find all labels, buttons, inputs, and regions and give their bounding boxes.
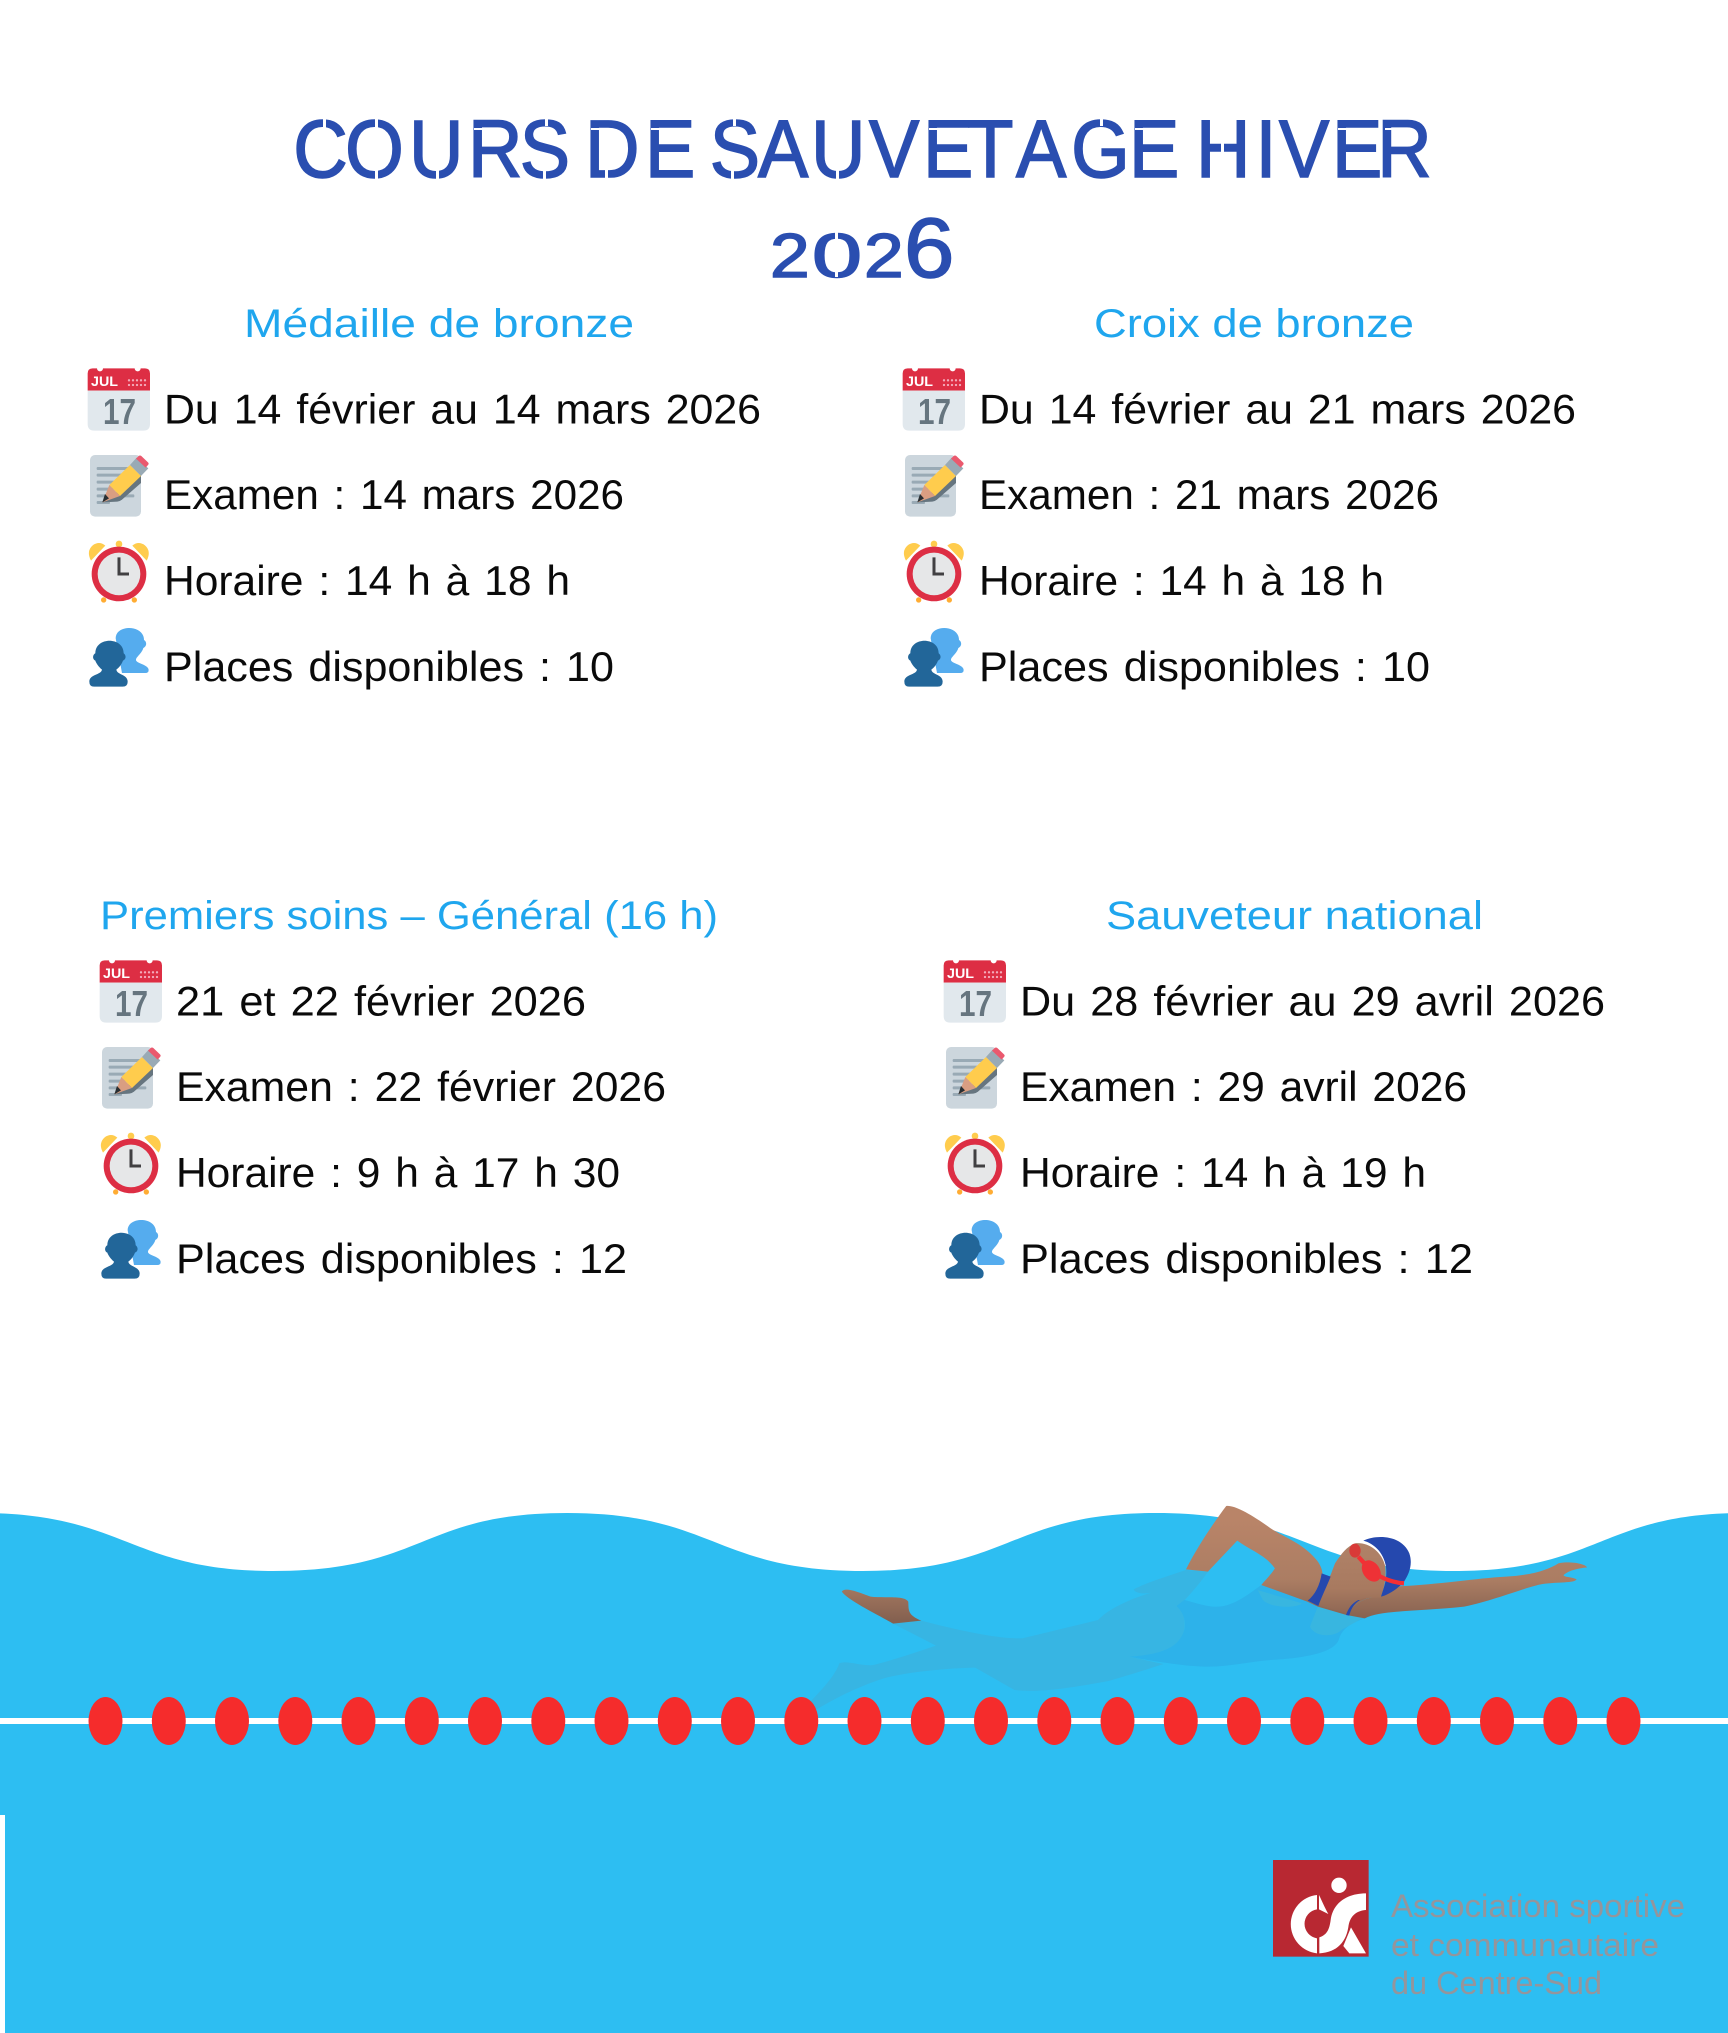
text: schedule: Horaire : 14 h à 18 h — [979, 557, 1384, 604]
text: dates: Du 14 février au 21 mars 2026 — [979, 386, 1576, 432]
swim cap — [1363, 1537, 1411, 1597]
icon: calendar: 17 — [103, 391, 136, 432]
icon: people — [945, 1220, 1005, 1279]
goggles — [1349, 1544, 1404, 1585]
text: schedule: Horaire : 14 h à 18 h — [164, 557, 570, 604]
text: seats: Places disponibles : 12 — [176, 1235, 627, 1282]
heading: Croix de bronze: Croix de bronze — [1094, 302, 1414, 346]
heading: Premiers soins: Premiers soins – Général (16 h) — [100, 894, 718, 938]
icon: calendar — [903, 368, 965, 432]
panel: Croix de bronze — [903, 302, 1576, 690]
floats — [88, 1697, 1640, 1745]
title: 6 — [904, 201, 954, 295]
icon: people — [904, 628, 964, 687]
text: dates: Du 28 février au 29 avril 2026 — [1020, 978, 1605, 1024]
head — [1318, 1543, 1386, 1618]
text: schedule: Horaire : 14 h à 19 h — [1020, 1149, 1426, 1196]
text: exam: Examen : 14 mars 2026 — [164, 471, 624, 518]
icon: calendar: JUL — [906, 373, 933, 389]
foot — [842, 1590, 921, 1624]
icon: people — [101, 1220, 161, 1279]
logo mark — [1273, 1860, 1369, 1957]
icon: alarm clock — [89, 541, 149, 603]
text: dates: 21 et 22 février 2026 — [176, 978, 586, 1024]
title: COURS DE SAUVETAGE HIVER — [293, 103, 1432, 195]
text: seats: Places disponibles : 10 — [979, 643, 1430, 690]
heading: Médaille de bronze: Médaille de bronze — [244, 302, 634, 346]
swimsuit straps — [1308, 1573, 1360, 1616]
panel: Premiers soins — [100, 894, 718, 1282]
logo: et communautaire — [1391, 1927, 1659, 1963]
icon: calendar — [944, 960, 1006, 1024]
text: dates: Du 14 février au 14 mars 2026 — [164, 386, 761, 432]
icon: memo — [905, 455, 964, 517]
submerged swimsuit — [1129, 1585, 1365, 1667]
text: exam: Examen : 29 avril 2026 — [1020, 1063, 1467, 1110]
title: 2 — [770, 222, 810, 291]
icon: calendar: 17 — [918, 391, 951, 432]
text: seats: Places disponibles : 12 — [1020, 1235, 1473, 1282]
icon: calendar — [100, 960, 162, 1024]
text: exam: Examen : 22 février 2026 — [176, 1063, 666, 1110]
submerged forearm — [1258, 1590, 1362, 1635]
icon: calendar: JUL — [91, 373, 118, 389]
swimmer — [800, 1506, 1587, 1713]
title: 0 — [812, 222, 862, 291]
logo — [1273, 1860, 1685, 2001]
logo: du Centre-Sud — [1391, 1965, 1602, 2001]
lane rope — [0, 1697, 1728, 1745]
heading: Sauveteur national: Sauveteur national — [1106, 894, 1483, 938]
icon: memo — [102, 1047, 161, 1109]
title — [293, 103, 1432, 295]
icon: alarm clock — [101, 1133, 161, 1195]
outstretched arm — [1347, 1562, 1587, 1618]
title: 2 — [864, 222, 904, 291]
icon: alarm clock — [904, 541, 964, 603]
text: schedule: Horaire : 9 h à 17 h 30 — [176, 1149, 620, 1196]
raised arm and torso — [1186, 1506, 1381, 1615]
swimmer body — [800, 1506, 1587, 1713]
text: exam: Examen : 21 mars 2026 — [979, 471, 1439, 518]
icon: calendar: JUL — [947, 965, 974, 981]
swimmer head — [1308, 1537, 1411, 1618]
icon: calendar: 17 — [959, 983, 992, 1024]
submerged legs and arm — [800, 1570, 1208, 1713]
icon: memo — [90, 455, 149, 517]
icon: memo — [946, 1047, 1005, 1109]
icon: calendar — [88, 368, 150, 432]
icon: alarm clock — [945, 1133, 1005, 1195]
logo text: Association sportive — [1391, 1888, 1685, 1924]
icon: calendar: 17 — [115, 983, 148, 1024]
icon: calendar: JUL — [103, 965, 130, 981]
water — [0, 1513, 1728, 2033]
panel: Médaille de bronze — [88, 302, 761, 690]
text: seats: Places disponibles : 10 — [164, 643, 614, 690]
icon: people — [89, 628, 149, 687]
panel: Sauveteur national — [944, 894, 1605, 1282]
